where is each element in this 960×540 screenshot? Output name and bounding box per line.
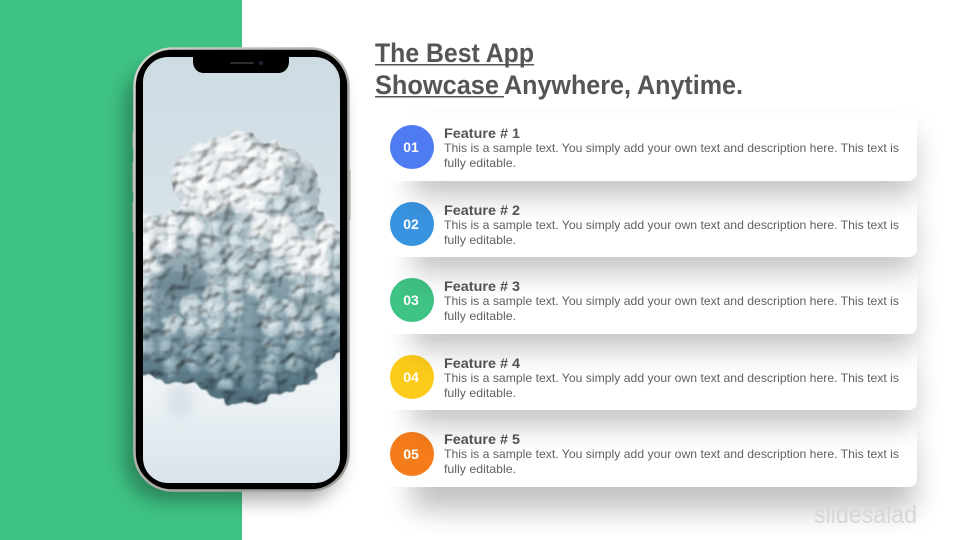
cloud puffs: lower dark [143, 316, 340, 391]
feature card 2: This is a sample text. You simply add your own text and description here. This text is [444, 218, 899, 232]
phone shadow [124, 64, 342, 502]
feature card 1: 01 [403, 139, 419, 155]
feature card 4: 04 [403, 369, 419, 385]
title: Anywhere, Anytime. [504, 70, 743, 100]
phone screen [143, 57, 340, 483]
feature card 1 [382, 113, 917, 197]
feature card 1: Feature # 1 [444, 125, 520, 141]
feature card 3 [382, 266, 917, 350]
green background panel [0, 0, 242, 540]
feature card 4: Feature # 4 [444, 355, 520, 371]
feature card 1: fully editable. [444, 156, 516, 170]
phone frame [134, 48, 348, 490]
side buttons [132, 132, 350, 232]
feature card 5: This is a sample text. You simply add your own text and description here. This text is [444, 447, 899, 461]
cloud dark crevices [154, 163, 328, 309]
feature card 2: fully editable. [444, 233, 516, 247]
feature card 2 [382, 189, 917, 273]
feature card 5: fully editable. [444, 462, 516, 476]
feature card 3: 03 [403, 292, 419, 308]
cloud base [134, 132, 350, 405]
cloud puffs: upper shaded [143, 182, 340, 340]
feature card 5: Feature # 5 [444, 431, 520, 447]
phone notch [193, 57, 289, 73]
title: Showcase [375, 70, 499, 100]
feature card 3: Feature # 3 [444, 278, 520, 294]
title [375, 38, 743, 100]
feature card 4: fully editable. [444, 386, 516, 400]
feature card 3: fully editable. [444, 309, 516, 323]
feature card 4 [382, 342, 917, 426]
watermark logo: slidesalad [814, 501, 917, 529]
phone mockup [124, 48, 353, 502]
feature card 4: This is a sample text. You simply add your own text and description here. This text is [444, 371, 899, 385]
feature card 2: Feature # 2 [444, 202, 520, 218]
cloud puffs: upper light [128, 129, 341, 285]
smoke wisp [167, 382, 193, 418]
feature card 2: 02 [403, 216, 419, 232]
feature card 5: 05 [403, 446, 419, 462]
smoke cloud [143, 130, 340, 407]
feature card 3: This is a sample text. You simply add your own text and description here. This text is [444, 294, 899, 308]
feature card 1: This is a sample text. You simply add your own text and description here. This text is [444, 141, 899, 155]
title: The Best App [375, 38, 534, 68]
phone speaker and camera [230, 61, 263, 65]
cloud centre streak [243, 300, 254, 390]
feature card 5 [382, 419, 917, 510]
